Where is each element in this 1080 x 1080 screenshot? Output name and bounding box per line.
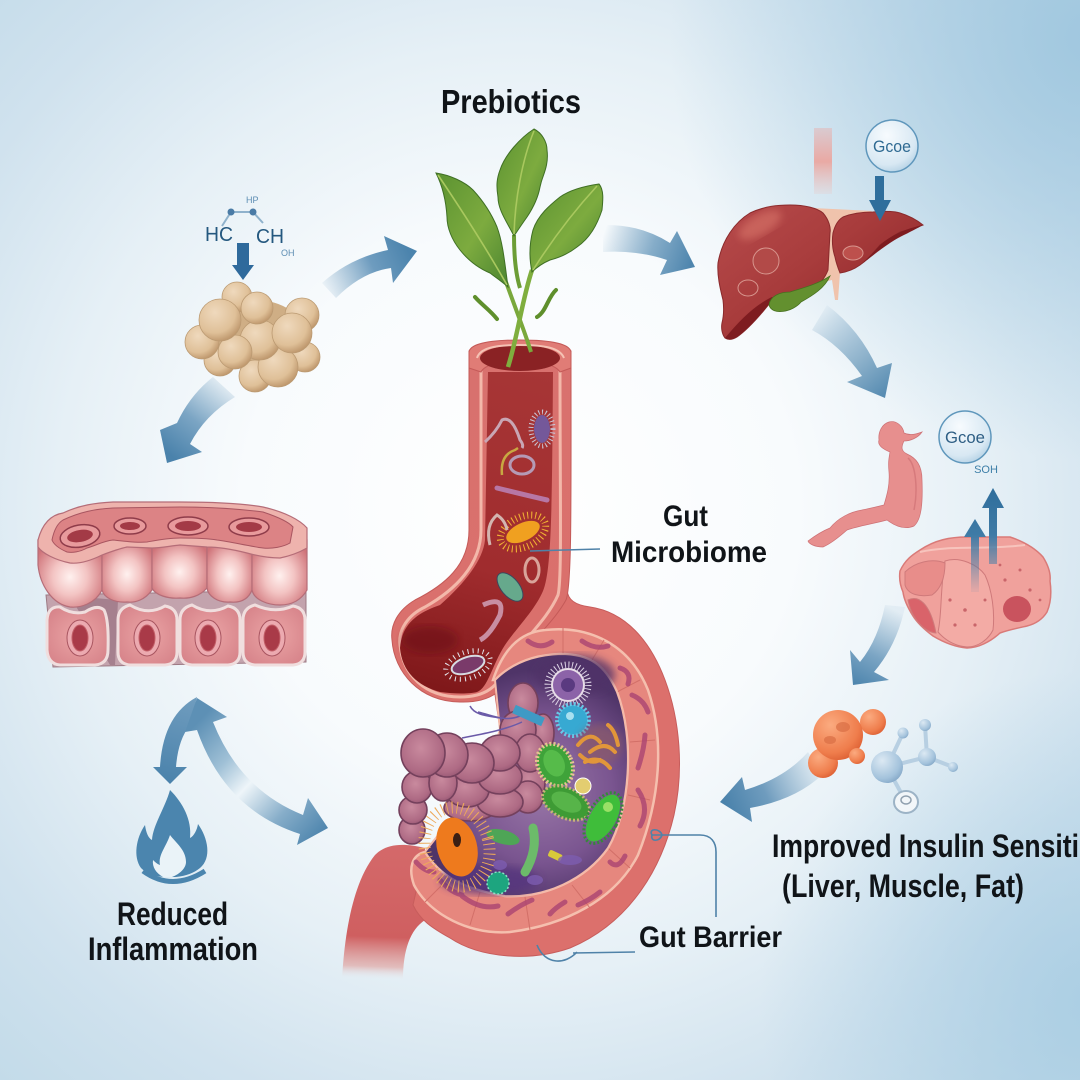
- icon: plant with three leaves: [436, 129, 603, 367]
- leader: gut barrier: [537, 830, 716, 961]
- arrow: liver to muscle: [812, 305, 892, 398]
- arrow: double-headed barrier and gut: [185, 698, 328, 845]
- arrow: glucose into liver: [869, 176, 891, 221]
- icon: liver: [718, 204, 923, 339]
- esophagus and stomach pouch: [392, 351, 571, 702]
- esophagus top rim: [469, 340, 571, 372]
- label: Improved Insulin Sensitivity: [772, 828, 1079, 904]
- upper row of cells: [38, 540, 307, 607]
- top surface with nuclei: [38, 502, 307, 563]
- stomach wall: [413, 530, 680, 956]
- arrow: barrier to inflammation: [153, 697, 197, 784]
- esophagus microbes: [442, 412, 553, 684]
- label: Reduced Inflammation: [88, 896, 258, 967]
- arrow: fat cluster to prebiotics: [322, 236, 417, 298]
- leader: gut microbiome: [530, 549, 600, 551]
- arrows: glucose uptake from tissue: [964, 488, 1004, 592]
- icon: blue molecule: [871, 719, 958, 813]
- icon: muscle and fat tissue: [900, 537, 1051, 648]
- label: Reduced Inflammation: Reduced: [117, 896, 228, 932]
- arrow: prebiotics to liver: [603, 225, 695, 275]
- colon threads: [462, 706, 522, 738]
- small intestine tube: [342, 845, 425, 980]
- label: Gut Barrier: Gut Barrier: [639, 921, 782, 954]
- icon: Gcoe bubble with SOH: Gcoe: [945, 428, 985, 447]
- icon: chemical formula: OH: [281, 248, 294, 258]
- icon: Gcoe bubble over liver: Gcoe: [873, 137, 911, 156]
- large intestine coils: [399, 683, 554, 844]
- label: Gut Microbiome: Gut: [663, 500, 708, 533]
- arrow: formula into fat cells: [232, 243, 254, 280]
- label: Improved Insulin Sensitivity: (Liver, Muscle, Fat): [782, 868, 1024, 904]
- icon: orange molecule: [808, 709, 886, 778]
- icon: chemical formula: CH: [256, 226, 284, 248]
- vessel above liver: [814, 128, 832, 194]
- microbes: [485, 665, 630, 894]
- orange bacterium: [416, 800, 498, 894]
- icon: Gcoe bubble with SOH: [939, 411, 998, 476]
- icon: chemical formula: HP: [246, 195, 259, 205]
- icon: fat cell cluster: [185, 282, 320, 392]
- arrow: muscle to molecules: [850, 605, 905, 685]
- icon: human figure: [808, 422, 922, 547]
- heading: Prebiotics: Prebiotics: [441, 83, 581, 120]
- lower row of cells: [46, 590, 306, 667]
- arrow: fat cluster to barrier cells: [160, 377, 235, 463]
- icon: flame: [136, 790, 207, 882]
- gallbladder: [769, 276, 830, 312]
- panel: gut barrier epithelial cells: [38, 502, 307, 667]
- icon: chemical formula: HC: [205, 224, 233, 246]
- label: Gut Microbiome: [611, 500, 767, 569]
- label: Gut Microbiome: Microbiome: [611, 536, 767, 569]
- label: Reduced Inflammation: Inflammation: [88, 931, 258, 967]
- panel: gut anatomy: [342, 340, 716, 980]
- arrow: molecules to gut: [720, 752, 822, 822]
- icon: Gcoe bubble over liver: [866, 120, 918, 172]
- icon: Gcoe bubble with SOH: SOH: [974, 464, 998, 476]
- microbe cavity: [399, 654, 630, 896]
- icon: chemical formula: [205, 195, 294, 258]
- gut barrier mucosa layer: [411, 628, 658, 932]
